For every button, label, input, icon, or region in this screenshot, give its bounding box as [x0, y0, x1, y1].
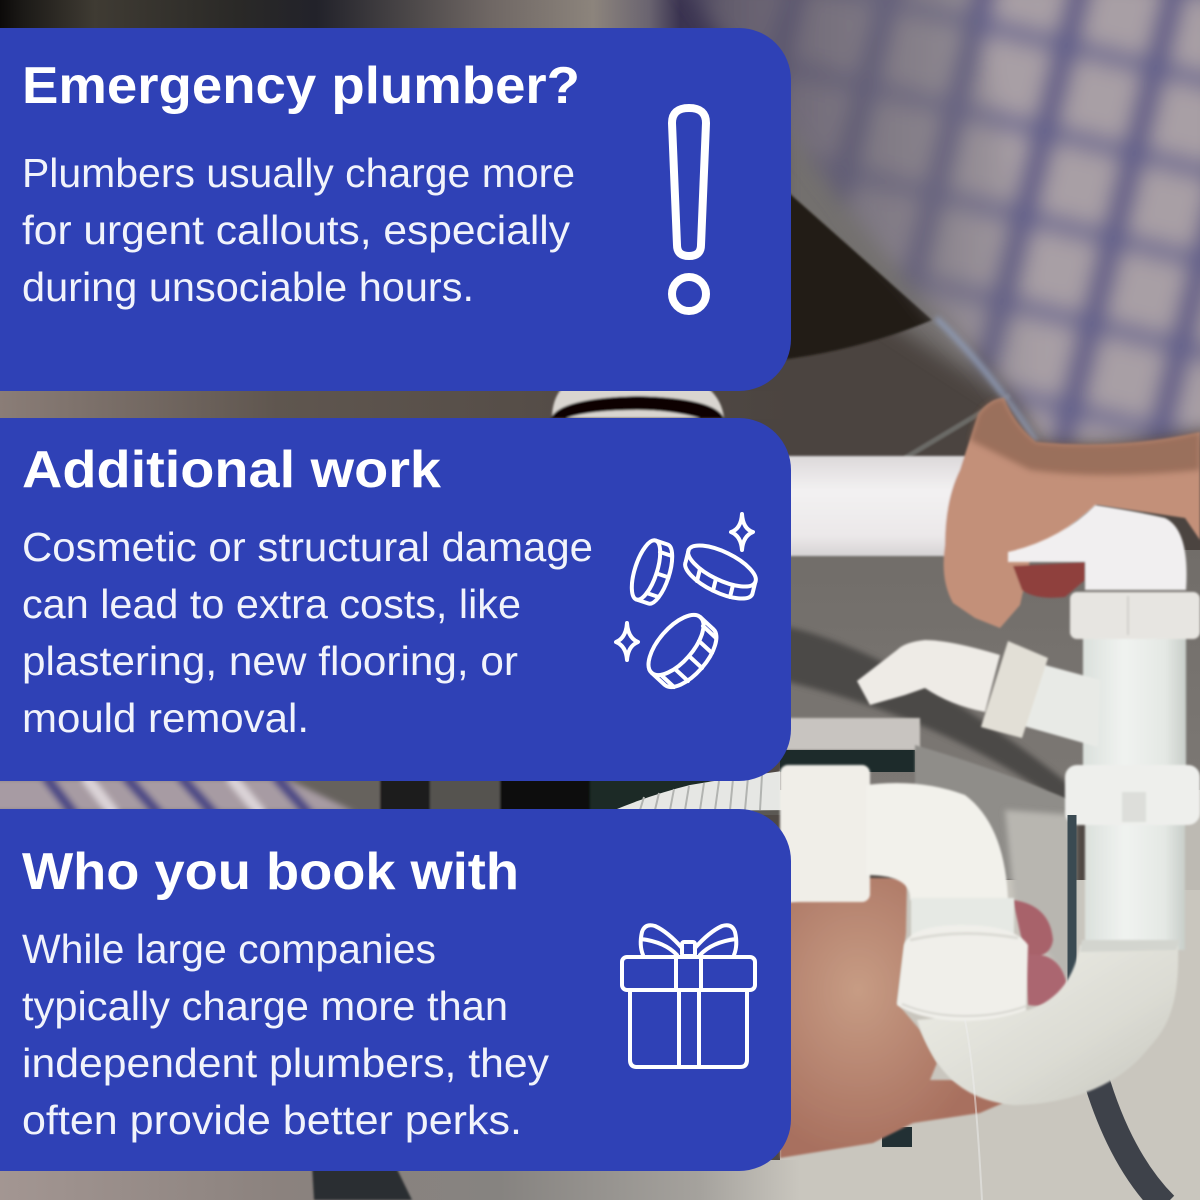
icon: exclamation mark	[672, 108, 706, 311]
wall and grey cabinet behind pipes	[0, 550, 1200, 1200]
text block: emergency plumber: for urgent callouts, especially	[22, 207, 571, 253]
text block: who you book with: While large companies	[22, 926, 436, 972]
shirt: blurred plaid fabric	[680, 0, 1200, 446]
threaded nut	[897, 925, 1028, 1021]
sink ring	[551, 388, 724, 418]
thin and thick braided hoses	[1072, 815, 1165, 1200]
panel: who you book with	[0, 809, 791, 1171]
bottom strip with hose	[0, 1160, 1000, 1200]
text block: who you book with	[22, 926, 550, 1143]
water trickle	[965, 1020, 982, 1200]
text block: additional work: Cosmetic or structural damage	[22, 524, 593, 570]
panel: additional work	[0, 418, 791, 781]
text block: additional work: can lead to extra costs, like	[22, 581, 521, 627]
heading: additional work: Additional work	[22, 441, 441, 499]
corrugated hose	[612, 770, 800, 811]
dark sink basin	[0, 0, 1200, 560]
text block: who you book with: often provide better perks.	[22, 1097, 522, 1143]
icon: gift box	[622, 925, 755, 1067]
white elbow, collars and vertical drain pipe	[857, 505, 1200, 950]
lower hand	[780, 878, 1067, 1158]
text block: emergency plumber: during unsociable hours.	[22, 264, 474, 310]
heading: emergency plumber: Emergency plumber?	[22, 57, 580, 115]
plaid and dark floor strip behind middle gap	[0, 776, 710, 815]
icon: falling coins and sparkles	[616, 514, 761, 687]
text block: who you book with: typically charge more than	[22, 983, 508, 1029]
text block: additional work: mould removal.	[22, 695, 309, 741]
text block: additional work	[22, 524, 593, 741]
large white elbow and J-trap	[780, 765, 1180, 1105]
backdrop strips	[0, 0, 791, 815]
upper hand gripping pipe	[780, 398, 1200, 628]
text block: who you book with: independent plumbers, they	[22, 1040, 550, 1086]
text block: additional work: plastering, new flooring, or	[22, 638, 518, 684]
heading: who you book with: Who you book with	[22, 843, 519, 901]
text block: emergency plumber	[22, 150, 575, 310]
side outlet with threaded nozzle	[857, 640, 1100, 747]
panel: emergency plumber	[0, 28, 791, 391]
text block: emergency plumber: Plumbers usually charge more	[22, 150, 575, 196]
